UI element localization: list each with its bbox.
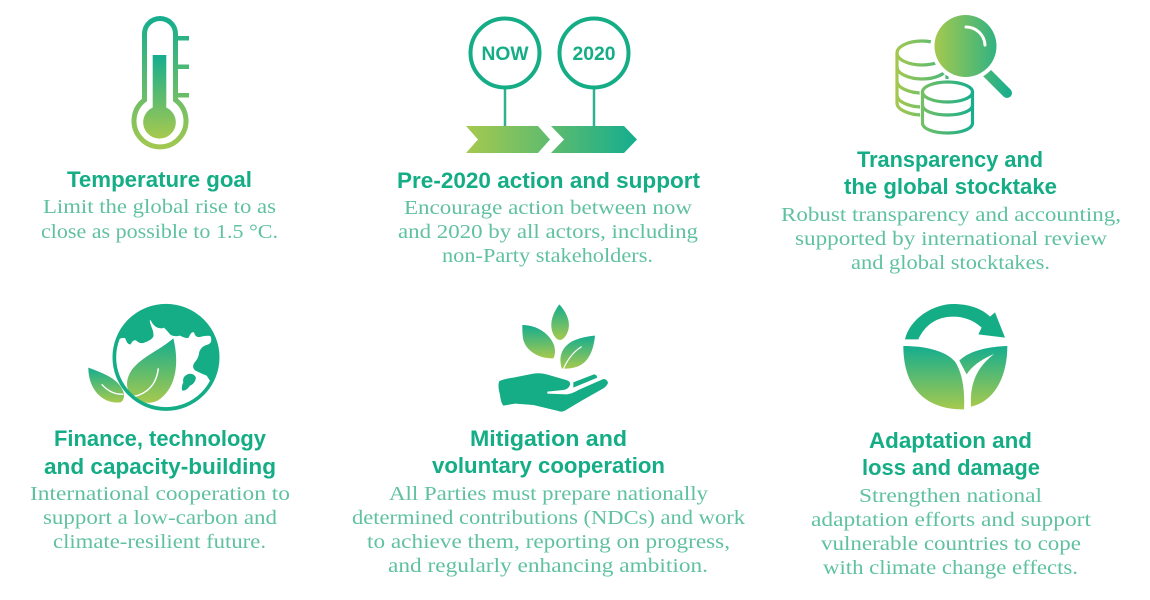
text block: and 2020 by all actors, including <box>398 221 698 243</box>
text block: vulnerable countries to cope <box>821 533 1081 555</box>
icon: thermometer <box>134 18 189 147</box>
text block <box>811 485 1092 579</box>
heading: Finance, technology <box>54 426 267 451</box>
heading: voluntary cooperation <box>432 453 665 478</box>
text block: to achieve them, reporting on progress, <box>367 531 730 553</box>
heading <box>44 426 276 479</box>
text block: with climate change effects. <box>823 557 1078 579</box>
text block: close as possible to 1.5 °C. <box>41 221 278 243</box>
text block <box>41 196 278 243</box>
text block: All Parties must prepare nationally <box>389 483 708 505</box>
text block: International cooperation to <box>30 483 290 505</box>
icon: timeline: 2020 <box>572 44 616 65</box>
text block: Encourage action between now <box>404 197 693 219</box>
heading: Temperature goal <box>67 167 252 192</box>
icon: hand with leaves <box>498 304 608 412</box>
icon: timeline: NOW <box>482 44 529 65</box>
heading: Adaptation and <box>869 428 1032 453</box>
panel: finance <box>30 305 290 553</box>
heading <box>844 147 1057 199</box>
panel: adaptation <box>811 304 1092 579</box>
text block: Limit the global rise to as <box>43 196 276 218</box>
text block: supported by international review <box>795 228 1108 250</box>
text block: support a low-carbon and <box>43 507 277 529</box>
heading: the global stocktake <box>844 174 1057 199</box>
icon: coins and magnifier <box>897 11 1007 135</box>
heading <box>862 428 1040 480</box>
icon: globe with leaves <box>88 305 218 409</box>
text block <box>352 483 745 577</box>
heading: loss and damage <box>862 455 1040 480</box>
text block: adaptation efforts and support <box>811 509 1092 531</box>
panel: pre-2020 action <box>397 18 701 267</box>
icon: leaves with circular arrow <box>903 304 1007 409</box>
text block: Strengthen national <box>859 485 1043 507</box>
text block <box>781 204 1121 274</box>
text block <box>30 483 290 553</box>
text block: and global stocktakes. <box>851 252 1050 274</box>
text block <box>398 197 698 267</box>
heading: Mitigation and <box>470 426 627 451</box>
heading: Pre-2020 action and support <box>397 168 701 193</box>
heading: Transparency and <box>857 147 1043 172</box>
heading <box>432 426 665 478</box>
heading: and capacity-building <box>44 454 276 479</box>
text block: determined contributions (NDCs) and work <box>352 507 745 529</box>
text block: Robust transparency and accounting, <box>781 204 1121 226</box>
text block: and regularly enhancing ambition. <box>388 555 708 577</box>
text block: climate-resilient future. <box>53 531 266 553</box>
panel: transparency <box>781 11 1121 274</box>
panel: temperature goal <box>41 18 278 243</box>
icon: timeline <box>466 18 637 153</box>
text block: non-Party stakeholders. <box>442 245 653 267</box>
panel: mitigation <box>352 304 745 577</box>
